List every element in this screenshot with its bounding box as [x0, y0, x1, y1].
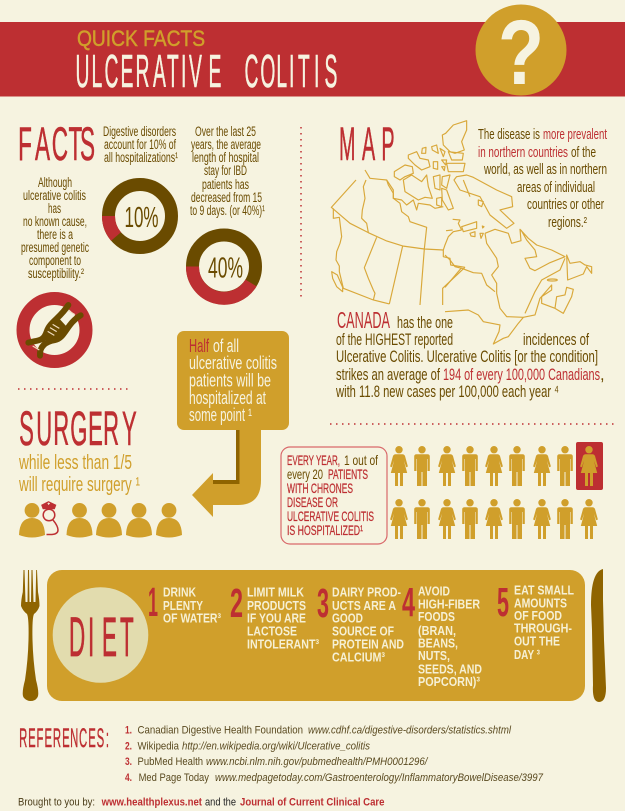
- chart: 10% donut: 10%: [124, 202, 158, 234]
- callout: one in twenty: IS HOSPITALIZED¹: [287, 522, 363, 538]
- tip 1: OF WATER³: [163, 611, 222, 626]
- icon: dna in circle: [23, 298, 86, 362]
- text: digestive disorders: [103, 124, 178, 165]
- tip 4: HIGH-FIBER: [418, 596, 480, 611]
- reference 3: 3.: [125, 756, 132, 768]
- text: no known cause: no known cause,: [23, 214, 87, 229]
- callout: one in twenty: PATIENTS: [328, 466, 368, 482]
- text: canada statistics: CANADA: [337, 307, 390, 333]
- icon: knife: [591, 569, 606, 702]
- tip 5: THROUGH-: [514, 621, 572, 636]
- reference 3: PubMed Health: [138, 756, 203, 768]
- chart: 40% donut: 40%: [208, 252, 243, 284]
- chart: 40% donut: [192, 235, 256, 298]
- text: less than one fifth: [18, 452, 140, 496]
- tip 3: GOOD: [332, 611, 363, 626]
- heading: diet circle: [53, 587, 148, 683]
- panel: map: [331, 117, 607, 401]
- text: hospital stay: patients has: [202, 177, 249, 192]
- reference 4: Med Page Today: [139, 772, 209, 784]
- reference 1: [125, 724, 511, 736]
- tip 3: 3: [317, 580, 329, 626]
- reference 2: 2.: [125, 740, 132, 752]
- tip 4: [402, 579, 482, 689]
- text: hospital stay: length of hospital: [192, 150, 259, 165]
- tip 5: DAY ³: [514, 647, 541, 662]
- text: no known cause: there is a: [37, 227, 73, 242]
- text: canada statistics: of the HIGHEST reported: [336, 331, 453, 349]
- text: less than one fifth: while less than 1/5: [18, 452, 132, 474]
- reference 1: 1.: [125, 724, 132, 736]
- callout: half of patients: ulcerative colitis: [189, 353, 277, 373]
- reference 2: http://en.wikipedia.org/wiki/Ulcerative_colitis: [182, 740, 370, 752]
- callout: one in twenty: every 20: [287, 466, 323, 482]
- callout: one in twenty: [281, 447, 387, 544]
- text: prevalence: of the: [571, 145, 596, 161]
- pictogram: people row one and two: [390, 442, 603, 539]
- reference 4: 4.: [125, 772, 132, 784]
- tip 3: [317, 580, 404, 665]
- callout: half of patients: of all: [213, 336, 239, 356]
- callout: half of patients: hospitalized at: [189, 388, 266, 408]
- tip 1: 1: [148, 579, 158, 625]
- text: prevalence: The disease is: [478, 127, 540, 143]
- tip 5: EAT SMALL: [514, 582, 574, 597]
- icon: question mark badge: [476, 2, 566, 104]
- text: no known cause: component to: [29, 253, 81, 268]
- heading: surgery: SURGERY: [19, 401, 137, 455]
- text: prevalence: [478, 127, 607, 231]
- panel: diet: [47, 570, 585, 701]
- text: hospital stay: years, the average: [191, 137, 261, 152]
- tip 4: SEEDS, AND: [418, 661, 482, 676]
- text: hospital stay: decreased from 15: [191, 190, 262, 205]
- tip 2: INTOLERANT³: [247, 636, 320, 651]
- tip 5: OUT THE: [514, 634, 560, 649]
- text: digestive disorders: all hospitalizations¹: [104, 150, 178, 165]
- tip 2: LACTOSE: [247, 624, 297, 639]
- title: ulcerative colitis: COLITIS: [244, 47, 337, 97]
- tip 3: DAIRY PROD-: [332, 585, 401, 600]
- heading: quick facts: QUICK FACTS: [77, 26, 205, 51]
- icon: nurse: [42, 502, 58, 534]
- heading: diet circle: DIET: [69, 606, 134, 669]
- reference 1: Canadian Digestive Health Foundation: [138, 724, 303, 736]
- reference 1: www.cdhf.ca/digestive-disorders/statistics.shtml: [308, 724, 511, 736]
- header banner: [0, 2, 625, 104]
- reference 2: [125, 740, 370, 752]
- tip 1: PLENTY: [163, 598, 203, 613]
- footer credit: [18, 797, 384, 809]
- panel: references: [19, 724, 544, 784]
- tip 3: UCTS ARE A: [332, 598, 396, 613]
- heading: facts: FACTS: [18, 118, 95, 170]
- footer credit: www.healthplexus.net: [101, 797, 202, 809]
- arrow: [192, 428, 261, 517]
- callout: one in twenty: 1 out of: [344, 452, 378, 468]
- tip 2: [230, 580, 320, 651]
- callout: one in twenty: WITH CHRONES: [287, 480, 353, 496]
- text: canada statistics: has the one: [397, 314, 453, 332]
- tip 5: AMOUNTS: [514, 595, 567, 610]
- tip 1: [148, 579, 222, 626]
- text: no known cause: presumed genetic: [21, 240, 89, 255]
- tip 4: (BRAN,: [418, 623, 456, 638]
- icon: patients row: [19, 503, 182, 538]
- text: prevalence: regions.²: [548, 215, 587, 231]
- chart: 10% donut: [108, 184, 172, 248]
- tip 4: AVOID: [418, 584, 450, 599]
- tip 3: SOURCE OF: [332, 624, 394, 639]
- text: no known cause: has: [48, 201, 61, 216]
- tip 5: OF FOOD: [514, 608, 562, 623]
- reference 4: www.medpagetoday.com/Gastroenterology/InflammatoryBowelDisease/3997: [215, 772, 544, 784]
- text: hospital stay: to 9 days. (or 40%)¹: [190, 203, 265, 218]
- text: prevalence: in northern countries: [478, 145, 568, 161]
- tip 4: NUTS,: [418, 648, 450, 663]
- panel: surgery: [18, 401, 182, 538]
- heading: map: MAP: [339, 117, 395, 170]
- text: canada statistics: strikes an average of: [336, 366, 440, 384]
- text: digestive disorders: Digestive disorders: [103, 124, 176, 139]
- map: canada outline: [331, 121, 592, 344]
- callout: one in twenty: EVERY YEAR,: [287, 452, 340, 468]
- text: no known cause: Although: [38, 175, 72, 190]
- tip 3: PROTEIN AND: [332, 636, 404, 651]
- text: canada statistics: incidences of: [523, 331, 589, 349]
- tip 4: BEANS,: [418, 635, 458, 650]
- callout: half of patients: [177, 331, 289, 517]
- text: no known cause: susceptibility.²: [28, 266, 84, 281]
- tip 4: FOODS: [418, 609, 455, 624]
- footer credit: and the: [205, 797, 236, 809]
- tip 3: CALCIUM³: [332, 650, 386, 665]
- text: digestive disorders: account for 10% of: [104, 137, 176, 152]
- text: no known cause: [21, 175, 89, 281]
- callout: half of patients: patients will be: [189, 370, 271, 390]
- text: less than one fifth: will require surgery ¹: [18, 474, 140, 496]
- tip 2: 2: [230, 580, 243, 626]
- text: no known cause: ulcerative colitis: [23, 188, 86, 203]
- icon: question mark badge: ?: [498, 2, 544, 104]
- text: canada statistics: ,: [600, 366, 605, 384]
- callout: one in twenty: ULCERATIVE COLITIS: [287, 508, 374, 524]
- callout: one in twenty: DISEASE OR: [287, 494, 338, 510]
- tip 5: 5: [497, 579, 509, 625]
- panel: facts: [18, 118, 265, 361]
- text: hospital stay: Over the last 25: [195, 124, 256, 139]
- tip 2: LIMIT MILK: [247, 585, 304, 600]
- footer credit: Journal of Current Clinical Care: [240, 797, 384, 809]
- text: canada statistics: [335, 307, 605, 401]
- tip 2: IF YOU ARE: [247, 611, 306, 626]
- tip 1: DRINK: [163, 585, 196, 600]
- title: ulcerative colitis: ULCERATIVE: [76, 47, 221, 97]
- tip 2: PRODUCTS: [247, 598, 306, 613]
- icon: fork: [21, 570, 40, 701]
- tip 5: [497, 579, 574, 662]
- callout: half of patients: some point ¹: [189, 405, 252, 425]
- reference 2: Wikipedia: [138, 740, 180, 752]
- callout: half of patients: Half: [189, 336, 210, 356]
- reference 3: [125, 756, 428, 768]
- heading: references: REFERENCES:: [19, 724, 109, 754]
- tip 4: 4: [402, 579, 415, 625]
- text: hospital stay: stay for IBD: [204, 163, 247, 178]
- footer credit: Brought to you by:: [18, 797, 95, 809]
- text: hospital stay: [190, 124, 265, 218]
- reference 3: www.ncbi.nlm.nih.gov/pubmedhealth/PMH0001296/: [206, 756, 428, 768]
- tip 4: POPCORN)³: [418, 674, 481, 689]
